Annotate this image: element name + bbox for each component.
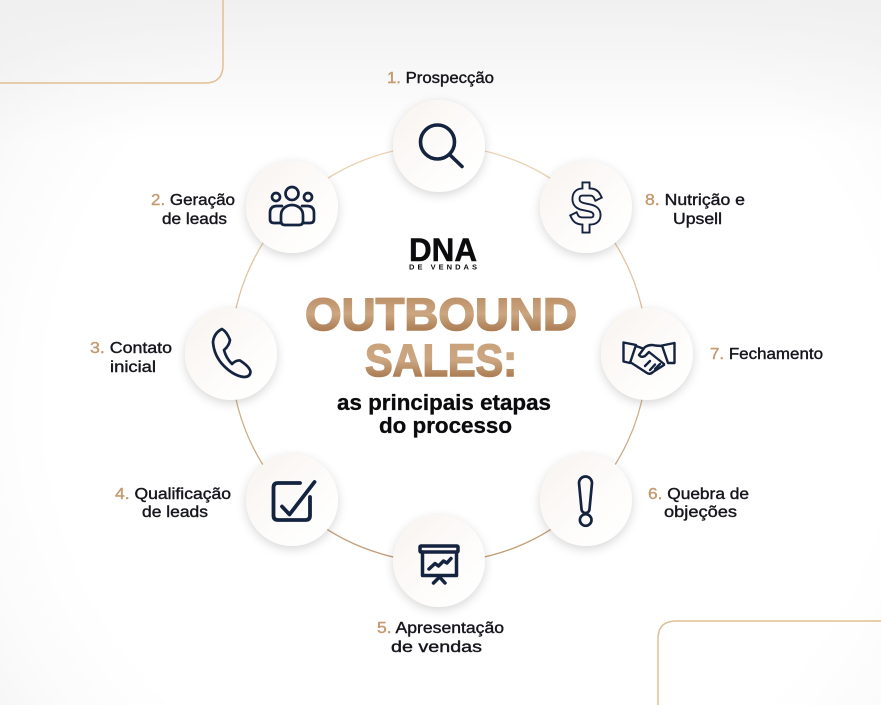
icon: dollar sign	[575, 186, 597, 229]
label: qualificação de leads: 4. Qualificação	[115, 486, 231, 503]
label: qualificação de leads: de leads	[142, 504, 208, 521]
label: quebra de objeções: objeções	[664, 504, 737, 521]
label: geração de leads: de leads	[162, 211, 227, 228]
brand logo: DE VENDAS	[409, 262, 477, 272]
label: nutrição e upsell: Upsell	[673, 211, 722, 228]
label: quebra de objeções	[648, 486, 749, 521]
step 2: geração de leads	[151, 161, 338, 253]
label: nutrição e upsell: 8. Nutrição e	[645, 192, 745, 209]
label: apresentação de vendas	[377, 620, 504, 656]
subtitle: do processo	[379, 413, 512, 438]
label: geração de leads: 2. Geração	[151, 192, 235, 209]
step 5: apresentação de vendas	[377, 515, 504, 656]
brand logo: DNA	[409, 232, 477, 268]
step 8: nutrição e upsell	[540, 161, 745, 253]
process ring	[231, 146, 647, 562]
icon: group of people	[270, 187, 314, 225]
step 1: prospecção	[387, 70, 494, 192]
label: contato inicial: 3. Contato	[90, 340, 172, 357]
label: prospecção: 1. Prospecção	[387, 70, 494, 87]
label: quebra de objeções: 6. Quebra de	[648, 486, 749, 503]
title	[305, 289, 577, 386]
label: fechamento: 7. Fechamento	[710, 346, 823, 363]
step 4: qualificação de leads	[115, 454, 338, 546]
icon: exclamation mark	[579, 476, 592, 526]
corner line: bottom right	[658, 621, 881, 705]
label: nutrição e upsell	[645, 192, 745, 228]
subtitle: as principais etapas	[337, 390, 551, 415]
icon: magnifying glass	[420, 125, 462, 166]
step 3: contato inicial	[90, 308, 277, 400]
icon: telephone	[213, 329, 250, 377]
label: geração de leads	[151, 192, 235, 228]
label: qualificação de leads	[115, 486, 231, 521]
icon: presentation board	[420, 546, 458, 583]
label: apresentação de vendas: 5. Apresentação	[377, 620, 504, 637]
icon: handshake	[624, 342, 674, 374]
step 6: quebra de objeções	[540, 454, 749, 546]
corner line: top left	[0, 0, 223, 83]
icon: checkbox	[274, 482, 314, 520]
subtitle	[337, 390, 551, 438]
step 7: fechamento	[601, 308, 823, 400]
title: OUTBOUND	[305, 289, 577, 340]
label: contato inicial: inicial	[110, 359, 156, 376]
title: SALES:	[365, 335, 517, 386]
label: apresentação de vendas: de vendas	[391, 639, 482, 656]
label: contato inicial	[90, 340, 172, 376]
